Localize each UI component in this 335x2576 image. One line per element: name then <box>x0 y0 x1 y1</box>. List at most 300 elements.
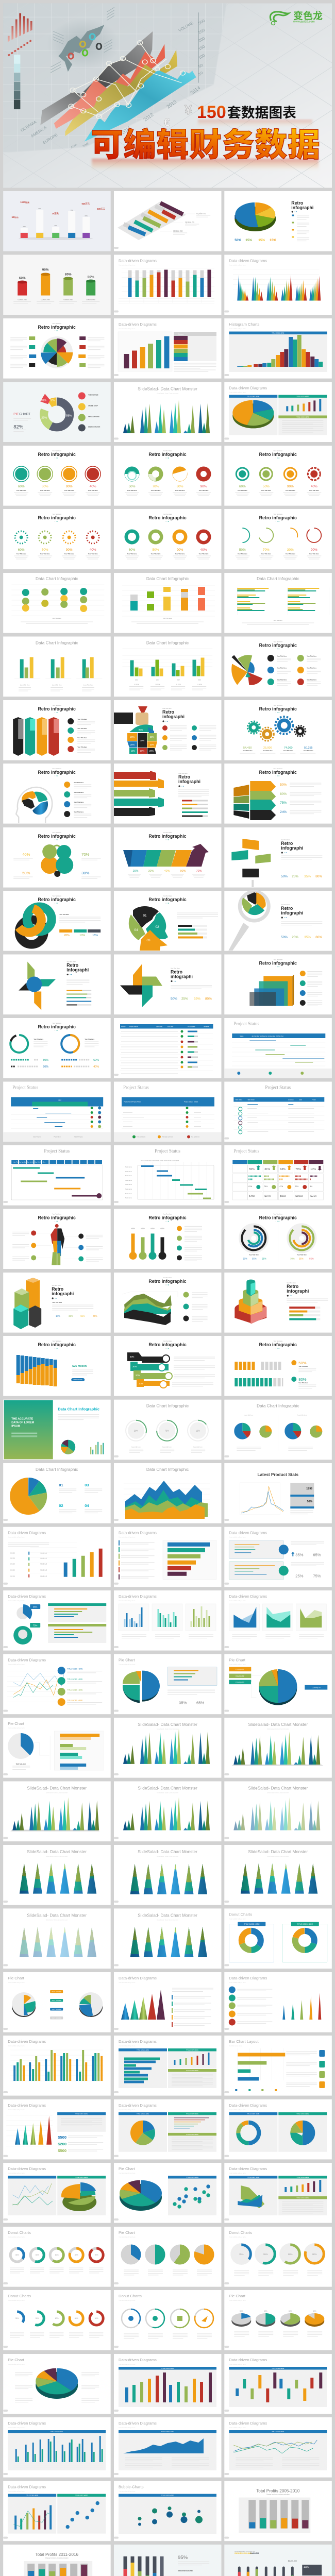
title: Data-driven Diagrams <box>119 1594 157 1599</box>
header <box>122 1097 214 1107</box>
chart: gray mountain series <box>40 31 153 125</box>
title: Pie Chart <box>229 1658 246 1663</box>
header <box>38 450 76 459</box>
panel: bar chart layout <box>224 2036 332 2096</box>
header <box>148 450 187 459</box>
labels: 60% <box>55 2254 59 2256</box>
chart: rose <box>41 336 73 368</box>
stat: 95% <box>178 2555 188 2561</box>
head puzzle: 01 <box>143 914 147 918</box>
labels: TEXT HOLDER <box>52 1991 61 1993</box>
heading: Retro <box>52 1286 64 1292</box>
subtitle: SlideSalad- Data Chart Monster <box>46 1792 68 1794</box>
percents: 80% <box>280 792 287 796</box>
header: Retro infographic <box>259 1215 297 1220</box>
stats: 70% <box>81 852 90 857</box>
title: Data-driven Diagrams <box>229 1594 267 1599</box>
panel: project status dates <box>114 1145 222 1206</box>
values: 35,7000 <box>176 683 181 685</box>
header: Project Status <box>184 1100 193 1103</box>
percents: Your Title Here <box>16 553 26 555</box>
cells <box>232 1165 323 1200</box>
panel: retro dash rings <box>3 509 111 569</box>
chart: columns <box>237 2372 321 2402</box>
subtitle: Your subtitle will go here <box>229 2363 246 2365</box>
panel: cart bars <box>224 1527 332 1587</box>
labels <box>10 2254 103 2273</box>
title: Donut Charts <box>119 2294 142 2298</box>
tabs: 30% <box>132 1365 137 1368</box>
chart: pie <box>259 1671 297 1705</box>
percents: 70% <box>196 870 202 873</box>
stat <box>178 2555 209 2576</box>
heading: infographi <box>66 968 89 973</box>
left panel <box>8 2494 56 2534</box>
donuts <box>10 2248 103 2262</box>
header: Your Text Here <box>52 768 62 770</box>
labels: TEXT HOLDER <box>52 2008 61 2010</box>
panel: bars and table <box>114 318 222 379</box>
values: Insert title here <box>193 1446 203 1448</box>
labels: CONSULTING <box>63 299 73 301</box>
table rows <box>120 1030 213 1074</box>
labels: Country 01 <box>236 1669 244 1671</box>
small pies <box>237 1414 322 1451</box>
currency symbols: ¥ <box>185 102 192 117</box>
chart: isometric bars <box>118 201 186 240</box>
header <box>38 704 76 713</box>
panel: pie of pies <box>224 1400 332 1460</box>
title: SlideSalad- Data Chart Monster <box>138 1786 197 1791</box>
heading: Your Text Here <box>171 968 180 970</box>
heading: Your Text Here <box>287 1282 296 1284</box>
panel: grouped columns <box>3 2036 111 2096</box>
list <box>64 782 91 818</box>
values: 55% <box>249 1168 255 1171</box>
panel: pie and bars panels <box>224 382 332 442</box>
header: Your Text Here <box>273 1213 283 1215</box>
icon list: THE PACKAGE <box>88 394 98 396</box>
captions: 55% <box>309 1257 314 1260</box>
subtitle: Your subtitle will go here <box>8 1727 25 1729</box>
percents: Your Title Here <box>199 489 209 492</box>
header <box>259 450 297 459</box>
chart: spikes <box>233 1732 320 1765</box>
labels <box>10 2317 103 2337</box>
labels: 35% <box>15 2317 19 2319</box>
values: 75% <box>165 1430 169 1432</box>
chart: 3D hbars <box>238 2048 285 2080</box>
percents: 90% <box>311 548 317 552</box>
numbered: 03 <box>85 1483 89 1487</box>
right panel <box>57 2494 106 2534</box>
chart: pie <box>123 1671 160 1703</box>
subtitle: Your subtitle will go here <box>119 2299 136 2301</box>
captions: Insert Title Here <box>83 684 93 686</box>
subtitle: Your subtitle will go here <box>229 1536 246 1538</box>
values: $37k <box>264 1195 271 1198</box>
title: Data Chart Infographic <box>36 1467 78 1472</box>
title: Data-driven Diagrams <box>229 1531 267 1535</box>
percents: Your Title Here <box>238 553 247 555</box>
panel: project table <box>114 1018 222 1078</box>
percents: Your Title Here <box>40 489 50 492</box>
percents: 24% <box>280 810 287 814</box>
percents: 60% <box>93 1059 99 1062</box>
title: Project Status <box>233 1021 260 1026</box>
subtitle: Your subtitle will go here <box>8 1981 25 1984</box>
header: Your Text Here <box>52 895 62 897</box>
header: Retro infographic <box>148 452 187 457</box>
chart: spikes <box>233 1797 320 1830</box>
donuts <box>10 1035 79 1053</box>
value labels: 20% <box>55 225 57 227</box>
stats: 80% <box>298 1377 307 1382</box>
chart: spikes <box>123 1728 210 1764</box>
title: Project Status <box>265 1085 291 1090</box>
heading <box>52 1284 93 1310</box>
donuts <box>242 1931 314 1950</box>
subtitle: Your subtitle will go here <box>8 2172 25 2174</box>
chart: area <box>124 1481 210 1519</box>
scatter panel: TITLE GOES HERE <box>186 2176 198 2178</box>
title: Project Status <box>44 1148 70 1154</box>
stat: ORDER INFOGRAPHIC <box>178 2570 193 2572</box>
panel: spikes series <box>114 1718 222 1778</box>
right stats <box>291 1541 324 1579</box>
labels: 10% <box>41 399 46 402</box>
right panels: TITLE GOES HERE <box>296 2176 309 2178</box>
percents: Your Title Here <box>199 553 209 555</box>
layered pie <box>234 1280 266 1324</box>
chart: bag blocks: 20% <box>150 736 154 738</box>
subtitle: Your subtitle will go here <box>119 1664 136 1666</box>
pies <box>13 1604 40 1645</box>
panel: lines and 3D pie <box>3 2163 111 2223</box>
frames: TITLE GOES HERE <box>297 1923 313 1925</box>
subtitle: Your subtitle will go here <box>229 391 246 393</box>
axis labels: 50 <box>198 63 204 69</box>
arrow band <box>123 844 209 867</box>
percents: 60% <box>18 548 25 552</box>
panel: revenue columns <box>3 1527 111 1587</box>
header: Retro infographic <box>148 515 187 520</box>
people <box>234 1364 283 1384</box>
captions: 55% <box>299 1257 304 1260</box>
values: $101k <box>295 1195 303 1198</box>
header: Retro infographic <box>38 1342 76 1347</box>
heading <box>287 1282 328 1302</box>
percents <box>125 485 211 496</box>
panel: four pies <box>114 2227 222 2287</box>
title: Project Status <box>123 1085 149 1090</box>
percents: 35% <box>194 997 200 1001</box>
body <box>58 1415 99 1420</box>
bars <box>48 1603 106 1643</box>
boxes: 45.5% <box>304 2566 309 2568</box>
values: 2015 <box>135 679 138 681</box>
tasks: Task name <box>125 1188 132 1190</box>
panel: spike columns <box>224 255 332 315</box>
main title: 可编辑财务数据 <box>91 127 320 163</box>
panel: stacked 3D ring <box>224 1273 332 1333</box>
header <box>11 1097 103 1107</box>
percents: 15% <box>270 239 276 242</box>
chart: hbars <box>54 1731 104 1770</box>
header: Retro infographic <box>38 897 76 902</box>
title: Data Chart Infographic <box>146 577 189 581</box>
caption <box>131 617 204 623</box>
left panel <box>119 2048 167 2088</box>
title: Pie Chart <box>119 2230 136 2235</box>
tasks: Task name <box>125 1179 132 1181</box>
labels: 55% <box>36 2254 39 2256</box>
heading: Retro <box>281 906 293 911</box>
values: 75% <box>264 1185 267 1188</box>
head puzzle: 02 <box>155 925 159 929</box>
value labels: 1000万元 <box>20 201 30 204</box>
side captions <box>15 2372 99 2402</box>
list: Your Title Here <box>277 655 287 657</box>
percents: 50% <box>281 936 288 939</box>
subtitle: Your subtitle will go here <box>8 2427 25 2429</box>
chart: bubbles <box>11 585 104 616</box>
subtitle: Your subtitle will go here <box>8 2490 25 2493</box>
percents <box>56 1315 97 1317</box>
heading <box>281 904 322 925</box>
title: Data-driven Diagrams <box>119 2421 157 2426</box>
header: Your Text Here <box>52 832 62 834</box>
subtitle: Your subtitle will go here <box>119 2172 136 2174</box>
panel: product stats <box>224 1463 332 1523</box>
heading: infographi <box>287 1289 309 1294</box>
header: Retro infographic <box>38 706 76 711</box>
labels: 60% <box>55 2317 59 2319</box>
percents: 75% <box>280 801 287 805</box>
panel: windmill <box>3 954 111 1014</box>
heading <box>66 960 89 984</box>
heading: Retro <box>162 709 175 715</box>
panel: donut and pie panels <box>224 2099 332 2159</box>
numbered <box>59 1483 102 1513</box>
title: Data-driven Diagrams <box>8 2421 46 2426</box>
percents <box>280 783 322 814</box>
heading <box>171 968 212 989</box>
head puzzle: 03 <box>146 939 150 942</box>
wall shading <box>3 3 226 152</box>
list <box>172 1988 213 2027</box>
panel: tall cones list <box>114 1972 222 2032</box>
header <box>38 1213 76 1222</box>
gantt <box>232 1041 325 1066</box>
title: Data-driven Diagrams <box>119 2358 157 2362</box>
pies: 75% <box>33 1624 38 1627</box>
panel: thermometers <box>114 1209 222 1269</box>
panel: cylinders <box>3 191 111 251</box>
header <box>119 2367 216 2407</box>
heading: Retro <box>281 841 293 846</box>
legend: Finish Project <box>74 1136 83 1138</box>
chart: cones <box>282 1993 321 2020</box>
tabs <box>127 1352 172 1388</box>
panel: lines panel <box>224 2417 332 2478</box>
logo: 变色龙 <box>293 10 323 22</box>
chart: pie <box>8 1733 34 1759</box>
options <box>160 212 210 234</box>
percents: Your Title Here <box>88 553 98 555</box>
subtitle: Your subtitle will go here <box>229 328 246 330</box>
chart: grouped bars <box>122 649 212 676</box>
panel: triple areas <box>224 1590 332 1651</box>
magnifier <box>228 892 269 951</box>
right panels: TITLE GOES HERE <box>296 416 309 418</box>
percents: 60% <box>18 485 25 488</box>
subtitle: Your subtitle will go here <box>8 1536 25 1538</box>
title: Data Chart Infographic <box>257 577 299 581</box>
header: Details <box>194 1100 198 1103</box>
subtitle: Your subtitle will go here <box>119 2109 136 2111</box>
left panel <box>229 2176 277 2215</box>
header: Retro infographic <box>38 834 76 839</box>
panel: histogram <box>224 318 332 379</box>
panel: total profits 2011 <box>3 2545 111 2576</box>
panel: spikes wide <box>114 1782 222 1841</box>
list: Your Title Here <box>77 718 88 720</box>
text <box>71 1365 93 1381</box>
values: 20,0000 <box>134 683 139 685</box>
header <box>233 1097 324 1101</box>
values: $21k <box>310 1195 316 1198</box>
labels: Country 02 <box>236 1675 244 1677</box>
table header: % Complete <box>188 1025 195 1027</box>
captions <box>122 1635 213 1638</box>
header <box>38 323 76 331</box>
percents: Your Title Here <box>175 553 185 555</box>
right panel 3D pie <box>57 2176 106 2215</box>
header: TITLE GOES HERE <box>161 2431 174 2433</box>
percents: 40% <box>90 485 96 488</box>
percents: Your Title Here <box>151 553 161 555</box>
cover text: THE ACCURATE <box>11 1418 34 1421</box>
labels <box>50 1990 63 2020</box>
stats: 74,000 <box>284 747 293 750</box>
subtitle: Subtitle Goes Here <box>229 2045 242 2047</box>
header: Retro infographic <box>148 834 187 839</box>
percents: 25% <box>292 875 298 878</box>
header <box>148 832 187 840</box>
percents <box>128 870 205 877</box>
heading: infographi <box>178 779 200 784</box>
subtitle: Your subtitle will go here <box>119 328 136 330</box>
panel: cones 1 <box>3 1845 111 1905</box>
values: 2018 <box>198 679 201 681</box>
header: Your Text Here <box>163 1277 172 1279</box>
list <box>267 655 321 685</box>
caption <box>12 1763 30 1770</box>
title: Data Chart Infographic <box>146 1404 189 1409</box>
value labels: 520万元 <box>82 202 90 206</box>
chart: 3D pie <box>120 2184 162 2211</box>
panel: project status 1 <box>224 1018 332 1078</box>
title: Data-driven Diagrams <box>8 2039 46 2044</box>
chart: green <box>186 1604 216 1631</box>
percents: 50% <box>263 485 270 488</box>
panel: stacked blocks <box>114 573 222 633</box>
panel: people <box>224 1336 332 1396</box>
captions <box>232 1635 324 1638</box>
header: Your Text Here <box>163 1340 172 1342</box>
axis labels: 300 <box>198 19 206 26</box>
percents: 30% <box>148 870 154 873</box>
subtitle: Your subtitle will go here <box>229 2109 246 2111</box>
axis labels: ASIA <box>71 143 78 149</box>
labels: 80% <box>75 2317 78 2319</box>
rings <box>125 530 211 544</box>
panel: 3D area panels <box>224 2163 332 2223</box>
header: Your Text Here <box>163 513 172 515</box>
labels: CONSULTING <box>18 299 27 301</box>
stats: 50,255 <box>304 747 313 750</box>
right stats: 75% <box>313 1574 321 1579</box>
header: Duration <box>288 1098 294 1100</box>
chart: pie <box>19 1487 38 1505</box>
progress <box>289 1308 320 1319</box>
captions: 30% <box>243 1257 247 1260</box>
percents: 50% <box>42 485 48 488</box>
icon: red mini bars <box>8 13 32 42</box>
percents: 90% <box>200 485 207 488</box>
labels: 60% <box>289 2310 292 2312</box>
subtitle: Your subtitle will go here <box>8 2363 25 2365</box>
bullet text <box>125 2458 209 2467</box>
heading <box>234 2550 259 2554</box>
header: Retro infographic <box>259 706 297 711</box>
percents: 75% <box>93 1315 97 1317</box>
header <box>259 768 297 776</box>
rings <box>236 468 320 480</box>
title: SlideSalad- Data Chart Monster <box>248 1722 308 1727</box>
list <box>162 725 216 750</box>
heading: Your Title Here <box>52 1301 62 1303</box>
values: 25,0000 <box>155 683 160 685</box>
header: TITLE GOES HERE <box>272 2431 284 2433</box>
panel: head puzzle <box>114 891 222 951</box>
icon list: ONLINE SHOP <box>88 404 98 406</box>
panel: magnifier <box>224 891 332 951</box>
frames <box>229 1922 327 1962</box>
right stats: 25% <box>295 1574 304 1579</box>
panel: spikes platform <box>224 1718 332 1778</box>
panel: stacked columns with table <box>114 255 222 315</box>
heading: Retro <box>291 200 304 206</box>
panel: staircase tabs <box>114 1336 222 1396</box>
chart: histogram <box>229 334 327 372</box>
table <box>174 332 216 371</box>
header: Your Text Here <box>163 832 172 834</box>
stats: 35% <box>179 1701 187 1705</box>
arrow stack <box>233 781 276 820</box>
title: Data-driven Diagrams <box>229 1976 267 1980</box>
subheading reflection <box>198 120 312 127</box>
chart: area <box>123 2438 204 2453</box>
title: Data-driven Diagrams <box>119 1531 157 1535</box>
header: Retro infographic <box>38 1215 76 1220</box>
percents: 80% <box>43 1059 48 1062</box>
progress <box>66 990 91 1005</box>
chart: yellow series <box>65 49 177 136</box>
percents: Your Title Here <box>16 489 26 492</box>
panel: combo and scatter <box>3 2481 111 2541</box>
